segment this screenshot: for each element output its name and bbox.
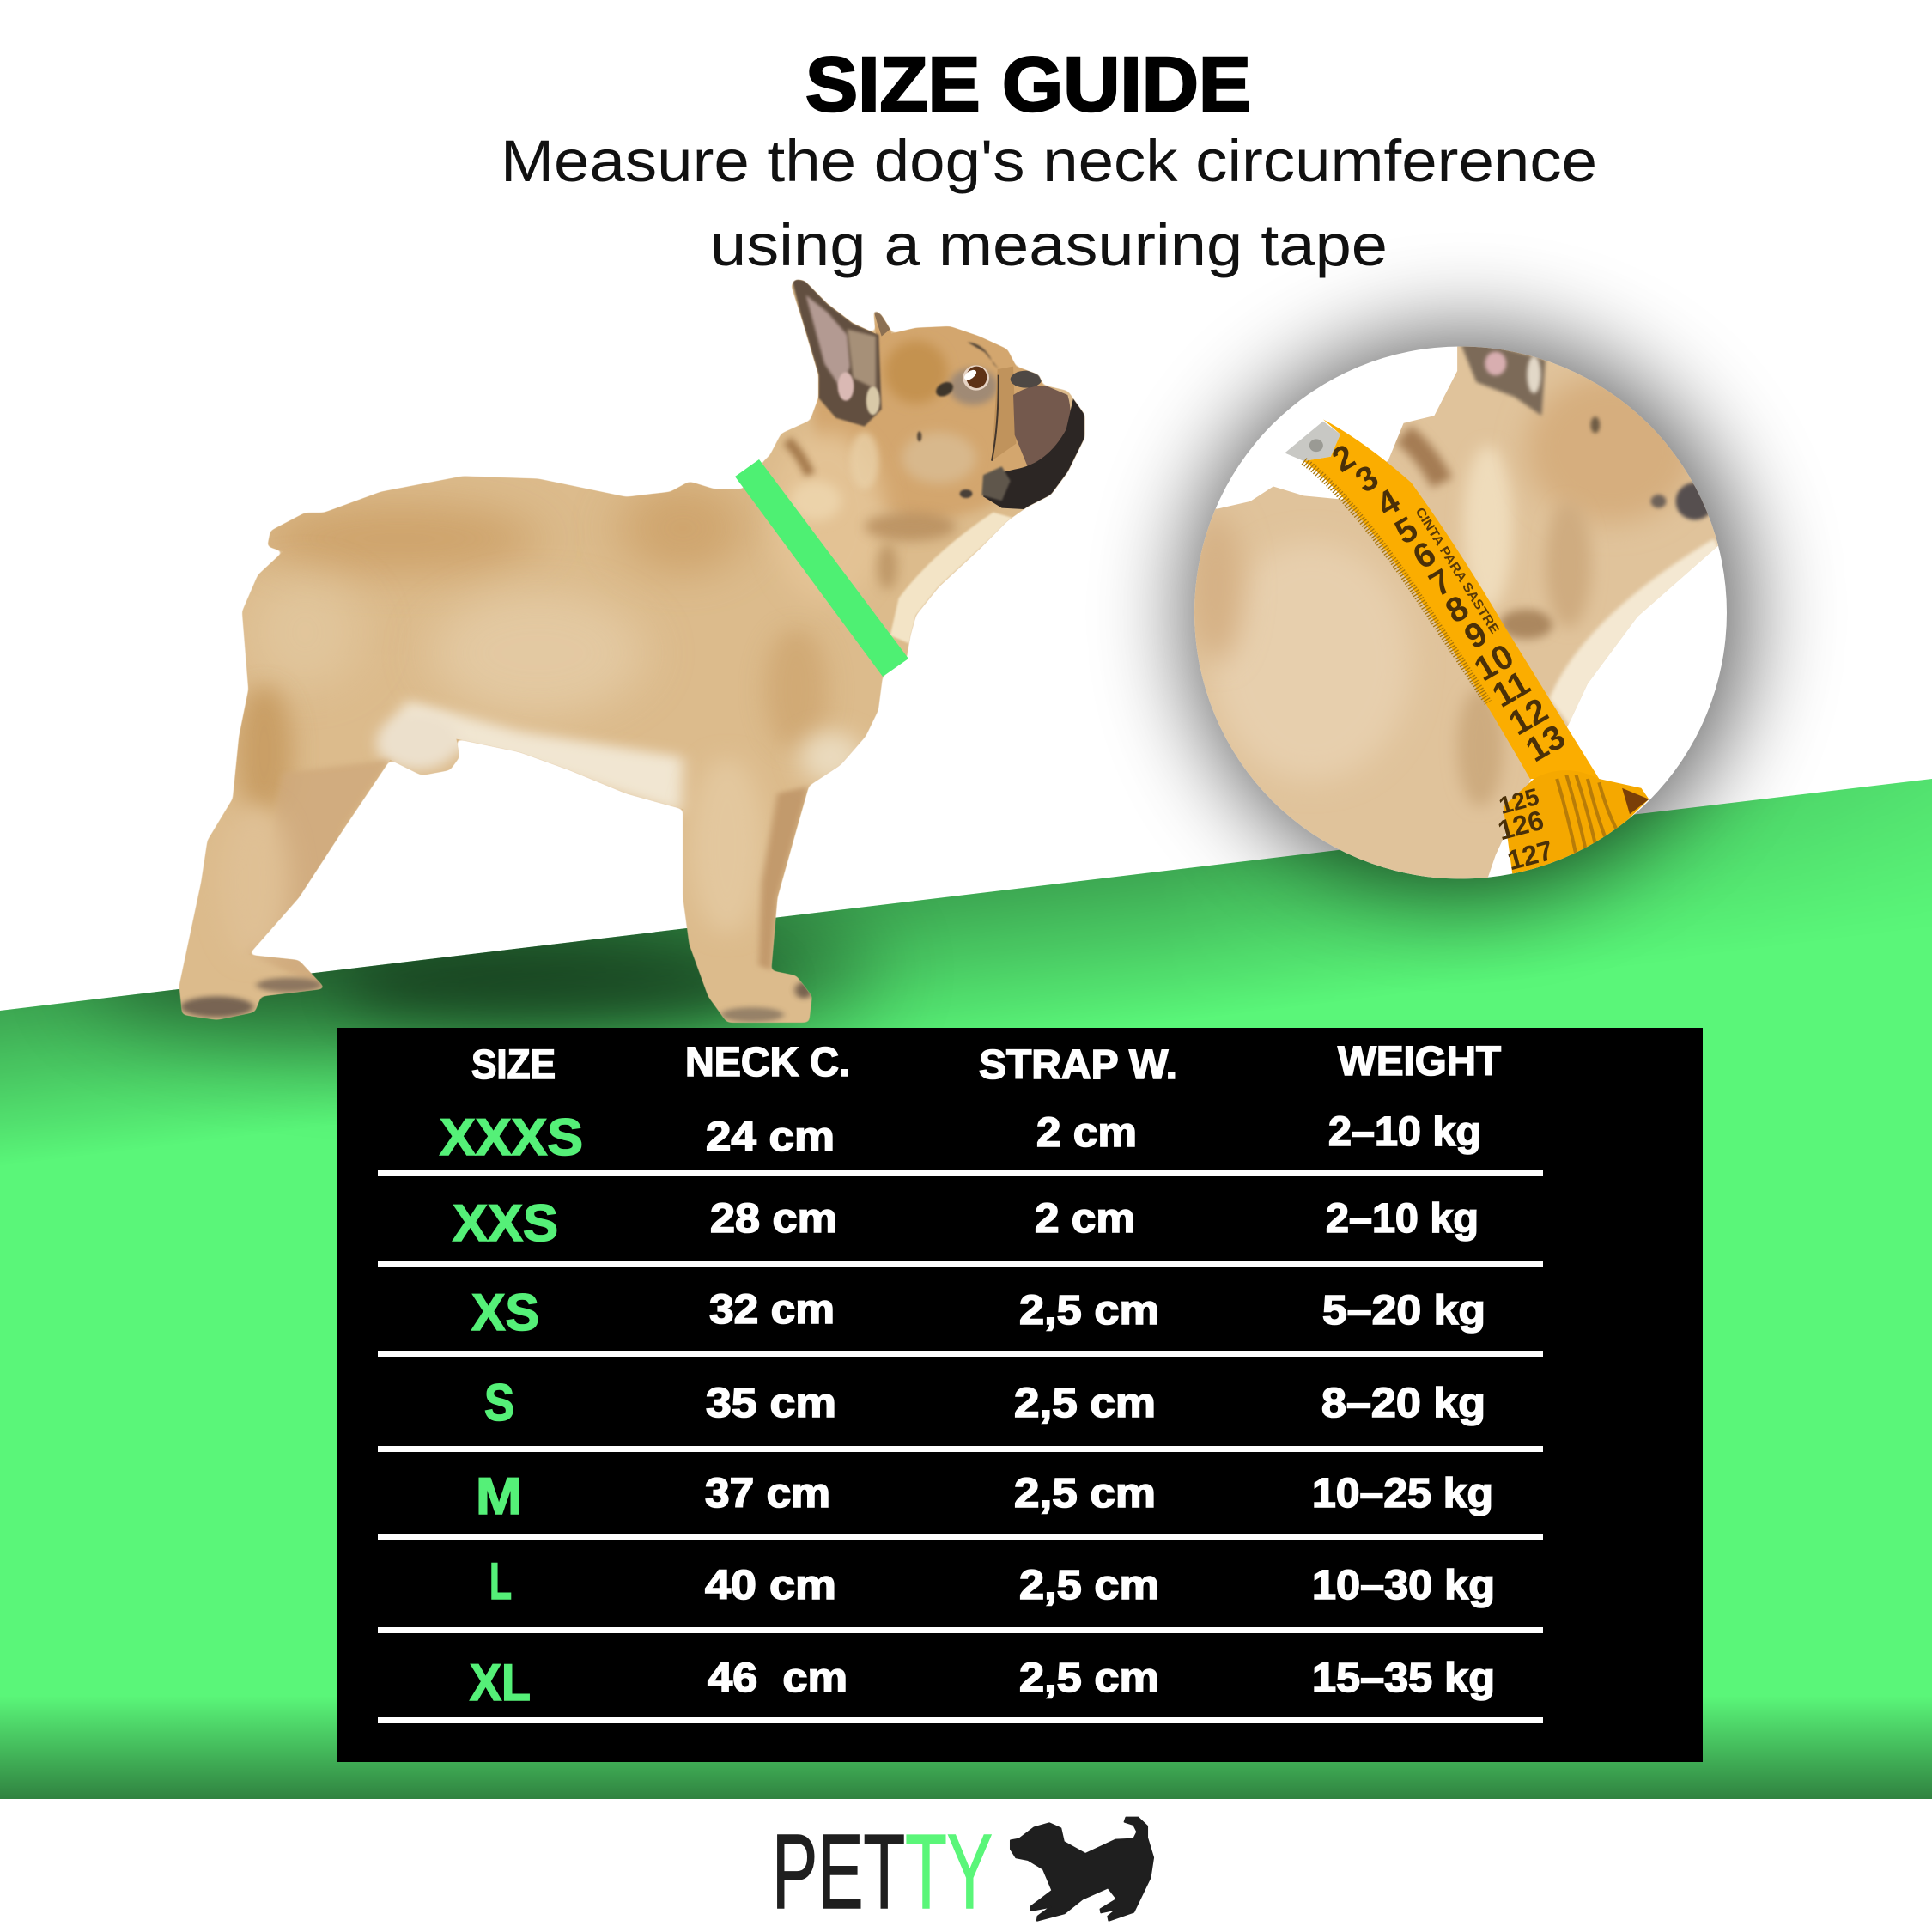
row XL: 46 cm	[708, 1656, 848, 1701]
row L: 40 cm	[705, 1563, 836, 1608]
head details	[770, 277, 1091, 644]
tape numbers: 7	[1423, 562, 1459, 605]
dog illustration	[179, 280, 1085, 1024]
subtitle	[501, 128, 1597, 278]
row XXS: 2 cm	[1035, 1196, 1135, 1242]
row XXXS: 24 cm	[706, 1115, 835, 1160]
tape numbers: 12	[1503, 691, 1554, 743]
row M: 37 cm	[705, 1471, 830, 1516]
row XS: 5–20 kg	[1322, 1288, 1485, 1334]
ear	[792, 277, 882, 427]
row XL: 2,5 cm	[1019, 1656, 1159, 1701]
row XXXS: XXXS	[440, 1109, 583, 1166]
tape numbers: 5	[1388, 509, 1425, 552]
row XXS: 28 cm	[710, 1196, 837, 1242]
row XS: XS	[471, 1284, 539, 1341]
tape tag	[1285, 422, 1340, 461]
table header row: STRAP W.	[979, 1042, 1177, 1088]
tape numbers: 11	[1486, 664, 1536, 715]
tape numbers: 126	[1495, 805, 1546, 846]
table header row: NECK C.	[685, 1040, 850, 1085]
row XS: 32 cm	[709, 1287, 835, 1333]
row S: S	[484, 1374, 514, 1431]
close-up of dog neck	[1194, 347, 1718, 879]
row XXXS	[440, 1109, 1481, 1166]
row L	[489, 1552, 1495, 1610]
row M: 2,5 cm	[1014, 1471, 1156, 1516]
row XXS: 2–10 kg	[1326, 1196, 1479, 1242]
green diagonal background band	[0, 773, 1932, 1803]
circle shadow	[1188, 333, 1746, 891]
tape numbers: 13	[1520, 718, 1571, 769]
tape numbers: 4	[1370, 482, 1406, 525]
row M	[476, 1467, 1493, 1525]
row XL	[470, 1654, 1495, 1711]
tape numbers: 3	[1349, 458, 1385, 501]
tape strip	[1304, 419, 1599, 779]
size table panel	[337, 1028, 1703, 1762]
tape numbers: 2	[1326, 437, 1362, 480]
eye area	[949, 368, 998, 405]
tape numbers: CINTA PARA SASTRE	[1413, 505, 1502, 636]
row L: 10–30 kg	[1312, 1563, 1495, 1608]
row XXXS: 2–10 kg	[1328, 1109, 1481, 1155]
row S: 8–20 kg	[1321, 1381, 1485, 1426]
logo	[772, 1814, 1153, 1931]
muzzle	[992, 367, 1016, 461]
subtitle: Measure the dog's neck circumference	[501, 128, 1597, 194]
table header row: WEIGHT	[1338, 1039, 1501, 1084]
row S	[484, 1374, 1485, 1431]
row S: 35 cm	[706, 1381, 836, 1426]
table header row: SIZE	[471, 1042, 556, 1088]
tape roll	[1503, 778, 1649, 874]
paws	[180, 978, 812, 1022]
row XL: XL	[470, 1654, 531, 1711]
fur shading	[220, 482, 862, 988]
tape numbers: 6	[1406, 534, 1443, 577]
tape numbers: 9	[1458, 614, 1494, 657]
row S: 2,5 cm	[1014, 1381, 1156, 1426]
tape numbers	[1326, 437, 1571, 876]
detail circle: neck with measuring tape	[1194, 347, 1727, 879]
row XL: 15–35 kg	[1312, 1656, 1495, 1701]
row XS: 2,5 cm	[1019, 1288, 1159, 1334]
row XS	[471, 1284, 1485, 1341]
subtitle: using a measuring tape	[710, 212, 1388, 278]
row M: 10–25 kg	[1312, 1471, 1493, 1516]
tape numbers: 127	[1504, 835, 1556, 876]
row L: 2,5 cm	[1019, 1563, 1159, 1608]
title: SIZE GUIDE	[805, 42, 1251, 128]
logo wordmark: PETTY	[772, 1814, 993, 1931]
row XXXS: 2 cm	[1036, 1110, 1137, 1156]
logo dog icon	[1011, 1818, 1153, 1921]
tape numbers: 8	[1439, 588, 1475, 631]
row XXS: XXS	[453, 1194, 558, 1252]
row L: L	[489, 1552, 512, 1610]
tape numbers: 10	[1468, 637, 1520, 689]
green neck band	[735, 459, 908, 677]
row XXS	[453, 1194, 1479, 1252]
tape numbers: 125	[1496, 783, 1542, 819]
row M: M	[476, 1467, 522, 1525]
table header row	[471, 1039, 1501, 1088]
